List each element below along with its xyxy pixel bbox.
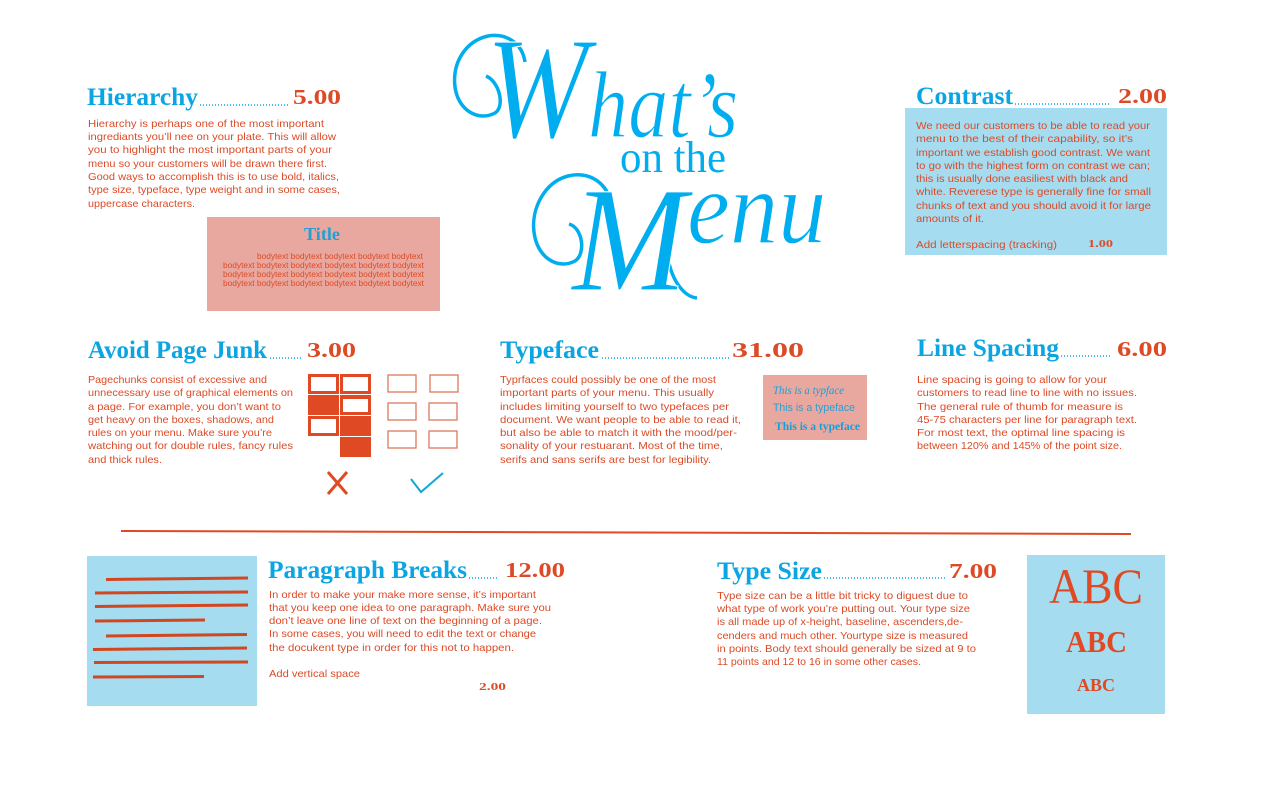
body text: typeface: document. We want people to be able to read it, [500, 414, 741, 426]
title line: Menu: enu [687, 149, 826, 266]
body text: typeface: sonality of your restuarant. Most of the time, [500, 440, 723, 452]
typeface sample card [763, 375, 867, 440]
body text: contrast: this is usually done easiliest with black and [916, 173, 1128, 185]
example body text: bodytext bodytext bodytext bodytext bodytext bodytext [223, 279, 425, 288]
body text: avoid page junk: get heavy on the boxes, shadows, and [88, 414, 274, 426]
body text: type size: 11 points and 12 to 16 in some other cases. [717, 656, 921, 668]
body text: avoid page junk: rules on your menu. Make sure you’re [88, 427, 272, 439]
heading: line spacing: Line Spacing [917, 335, 1060, 362]
body text: contrast: white. Reverese type is generally fine for small [915, 186, 1151, 198]
body text: avoid page junk: a page. For example, you don’t want to [88, 401, 281, 413]
icon: paragraph lines [87, 556, 257, 706]
title flourish: Menu [534, 175, 697, 298]
heading: avoid page junk: Avoid Page Junk [88, 337, 267, 364]
body text: type size: in points. Body text should generally be sized at 9 to [717, 643, 976, 655]
body text: hierarchy: you to highlight the most important parts of your [88, 144, 333, 156]
body text: line spacing: 45-75 characters per line for paragraph text. [917, 414, 1137, 426]
body text: hierarchy: menu so your customers will be drawn there first. [88, 158, 327, 170]
panel: avoid page junk [87, 337, 458, 494]
type size samples [1027, 555, 1165, 714]
body text: typeface: important parts of your menu. This usually [500, 387, 715, 399]
body text: paragraph breaks [269, 589, 551, 680]
body text: contrast: important we establish good contrast. We want [916, 147, 1150, 159]
title line: on the: on the [620, 133, 726, 182]
sample: medium ABC: ABC [1066, 624, 1127, 659]
body text: line spacing: between 120% and 145% of the point size. [917, 440, 1122, 452]
body text: line spacing [917, 374, 1137, 452]
body text: avoid page junk: watching out for double rules, fancy rules [87, 440, 293, 452]
price: hierarchy: 5.00 [293, 85, 341, 109]
body text: avoid page junk: Pagechunks consist of excessive and [88, 374, 267, 386]
body text: line spacing: Line spacing is going to allow for your [917, 374, 1108, 386]
example body text [223, 252, 425, 288]
body text: typeface [500, 374, 741, 466]
body text: contrast: amounts of it. [916, 213, 984, 225]
body text: paragraph breaks: In order to make your make more sense, it’s important [269, 589, 536, 601]
panel: line spacing [917, 335, 1167, 452]
sample: small ABC: ABC [1077, 675, 1115, 695]
body text: hierarchy: Hierarchy is perhaps one of the most important [88, 118, 324, 130]
body text: contrast: menu to the best of their capability, so it’s [916, 133, 1133, 145]
sample: large ABC: ABC [1049, 558, 1143, 614]
body text: paragraph breaks: Add vertical space [269, 668, 360, 680]
price: paragraph breaks: 12.00 [505, 558, 565, 582]
price: type size: 7.00 [949, 559, 997, 583]
body text: typeface: includes limiting yourself to two typefaces per [500, 401, 730, 413]
title: What's on the Menu [455, 8, 826, 323]
body text: type size: is all made up of x-height, baseline, ascenders,de- [717, 616, 964, 628]
heading: paragraph breaks: Paragraph Breaks [268, 557, 467, 584]
icon: cross mark [328, 472, 347, 494]
panel: type size [716, 555, 1165, 714]
heading: contrast: Contrast [916, 83, 1014, 110]
body text: contrast: Add letterspacing (tracking) [916, 239, 1057, 251]
example body text: bodytext bodytext bodytext bodytext bodytext bodytext [223, 270, 425, 279]
body text: typeface: but also be able to match it with the mood/per- [500, 427, 738, 439]
sample: script: This is a typface [773, 383, 845, 397]
price: typeface: 31.00 [732, 338, 804, 362]
body text: type size [716, 590, 976, 668]
panel: hierarchy [87, 84, 440, 311]
contrast background [905, 108, 1167, 255]
body text: hierarchy [88, 118, 340, 210]
price: line spacing: 6.00 [1117, 337, 1167, 361]
body text: avoid page junk [87, 374, 293, 466]
sub price: vertical space: 2.00 [479, 682, 506, 693]
body text: line spacing: The general rule of thumb for measure is [917, 401, 1123, 413]
example title: Title [304, 224, 340, 244]
body text: typeface: Typrfaces could possibly be one of the most [500, 374, 716, 386]
title flourish: What's [455, 35, 525, 116]
body text: contrast [915, 120, 1151, 251]
body text: hierarchy: Good ways to accomplish this is to use bold, italics, [88, 171, 339, 183]
body text: hierarchy: ingrediants you’ll nee on your plate. This will allow [88, 131, 336, 143]
panel: contrast [905, 83, 1167, 255]
panel: paragraph breaks [87, 556, 565, 706]
heading: typeface: Typeface [500, 337, 599, 364]
price: contrast: 2.00 [1118, 84, 1167, 108]
panel: typeface [500, 337, 867, 466]
icon: check mark [411, 473, 443, 492]
body text: paragraph breaks: that you keep one idea to one paragraph. Make sure you [269, 602, 551, 614]
body text: hierarchy: uppercase characters. [88, 198, 195, 210]
sample: serif: This is a typeface [775, 421, 860, 433]
body text: avoid page junk: unnecessary use of graphical elements on [88, 387, 293, 399]
body text: contrast: We need our customers to be able to read your [916, 120, 1151, 132]
price: avoid page junk: 3.00 [307, 338, 356, 362]
body text: paragraph breaks: In some cases, you will need to edit the text or change [269, 628, 536, 640]
body text: typeface: serifs and sans serifs are best for legibility. [500, 454, 711, 466]
body text: contrast: chunks of text and you should avoid it for large [916, 200, 1151, 212]
body text: paragraph breaks: don’t leave one line of text on the beginning of a page. [269, 615, 542, 627]
heading: type size: Type Size [717, 558, 822, 585]
title line: What's: What’s [486, 8, 738, 169]
title line: Menu: M [572, 158, 687, 323]
body text: line spacing: For most text, the optimal line spacing is [917, 427, 1125, 439]
body text: type size: cenders and much other. Yourtype size is measured [717, 630, 968, 642]
body text: hierarchy: type size, typeface, type weight and in some cases, [88, 184, 340, 196]
example body text: bodytext bodytext bodytext bodytext bodytext [257, 252, 424, 261]
sample: sans serif: This is a typeface [773, 402, 855, 414]
body text: type size: Type size can be a little bit tricky to diguest due to [717, 590, 968, 602]
body text: type size: what type of work you’re putting out. Your type size [716, 603, 970, 615]
example body text: bodytext bodytext bodytext bodytext bodytext bodytext [223, 261, 425, 270]
icon: cluttered boxes [308, 374, 371, 457]
sub price: letterspacing: 1.00 [1088, 239, 1113, 250]
example card: title and body text [207, 217, 440, 311]
body text: line spacing: customers to read line to line with no issues. [917, 387, 1137, 399]
section divider [121, 531, 1131, 534]
body text: avoid page junk: and thick rules. [88, 454, 162, 466]
body text: contrast: to go with the highest form on contrast we can; [916, 160, 1150, 172]
body text: paragraph breaks: the docukent type in order for this not to happen. [269, 642, 514, 654]
icon: clean boxes [388, 375, 458, 448]
heading: hierarchy: Hierarchy [87, 84, 199, 111]
